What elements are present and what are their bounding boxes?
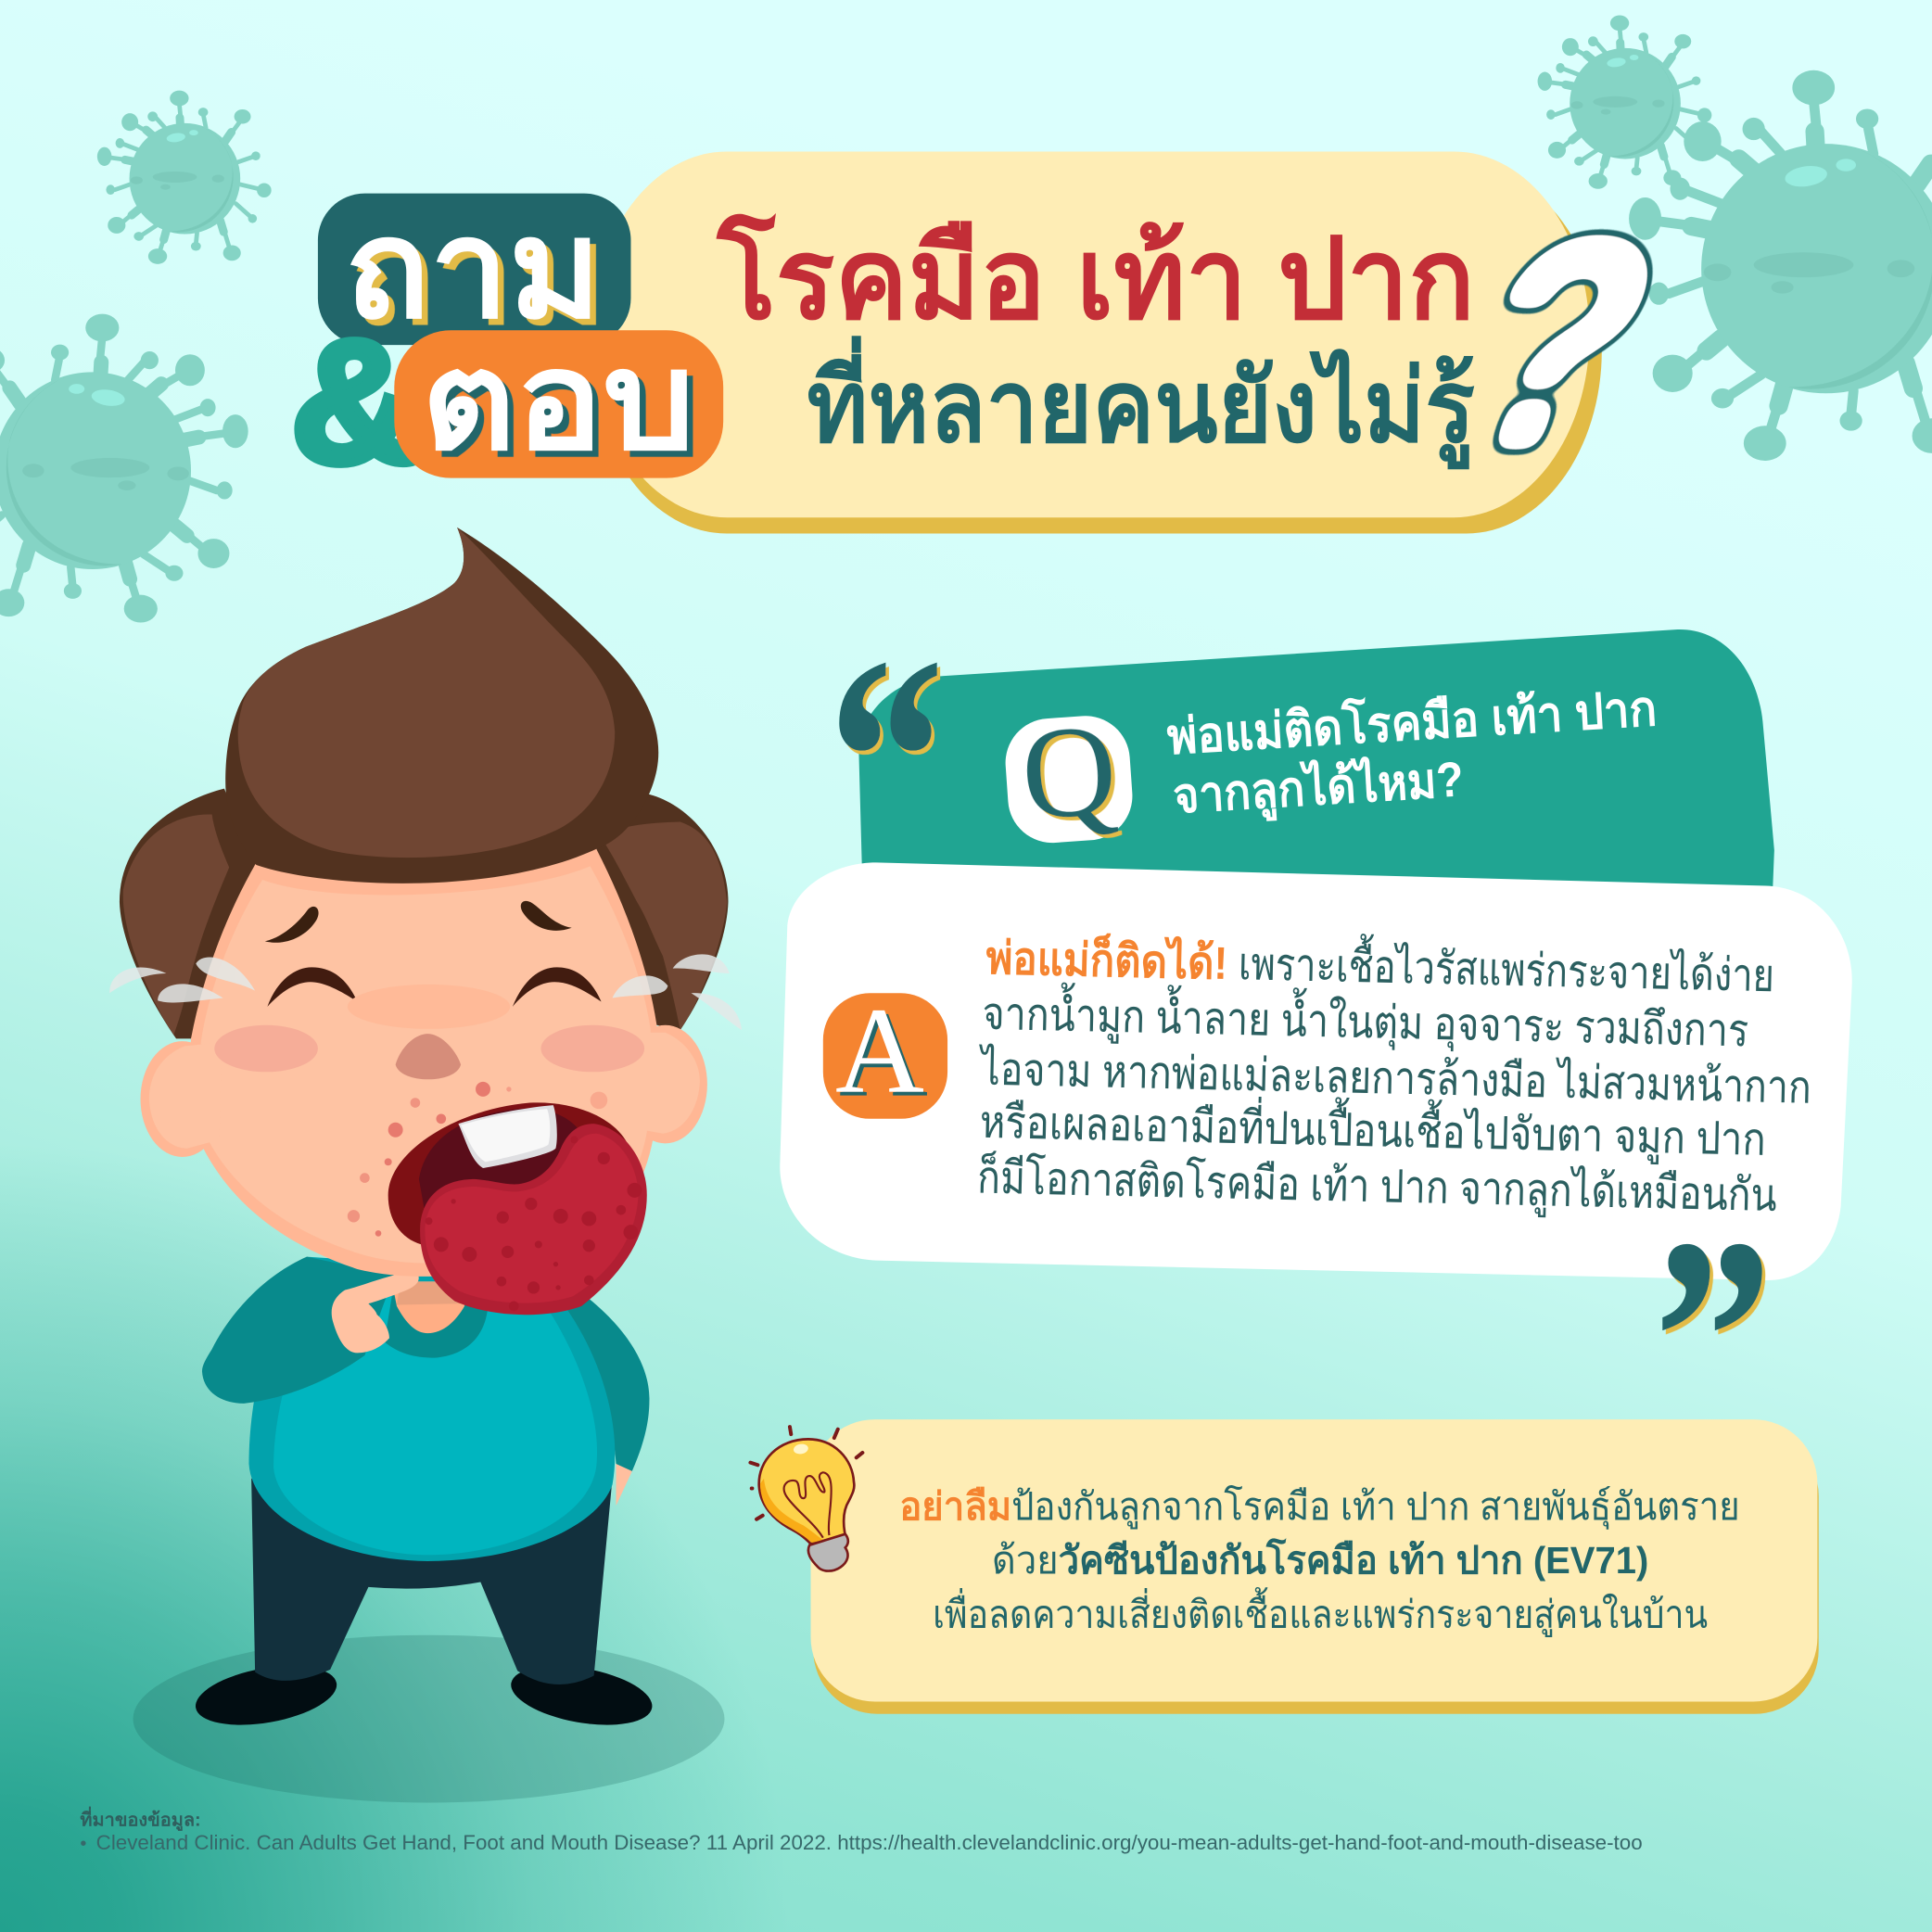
title pill — [591, 151, 1602, 533]
answer text — [975, 925, 1814, 1224]
icon: light bulb — [750, 1427, 862, 1571]
left ear — [141, 1041, 224, 1157]
left shoe — [191, 1657, 341, 1735]
badge: ตอบ: ตอบ — [422, 324, 695, 478]
reminder text: ด้วย — [992, 1539, 1059, 1582]
left hair — [120, 789, 256, 1038]
opening quote: “ — [828, 596, 945, 920]
reminder box — [811, 1419, 1819, 1714]
answer bubble — [780, 862, 1852, 1280]
eyebrows — [265, 901, 572, 943]
panel: reminder — [750, 1419, 1819, 1714]
source note: ที่มาของข้อมูล: — [80, 1806, 201, 1833]
source note: • — [80, 1834, 86, 1854]
answer text: หรือเผลอเอามือที่ปนเปื้อนเชื้อไปจับตา จมูก ปาก — [979, 1089, 1767, 1167]
hair top shadow — [225, 527, 658, 883]
face — [197, 866, 651, 1264]
panel: question — [828, 596, 1774, 920]
left arm sleeve — [202, 1257, 394, 1404]
question text: จากลูกได้ไหม? — [1172, 750, 1465, 827]
answer text: พ่อแม่ก็ติดได้! — [985, 930, 1228, 989]
tongue spots — [426, 1136, 642, 1311]
panel: answer — [780, 862, 1852, 1496]
A icon: A — [835, 983, 924, 1119]
right ear — [624, 1025, 707, 1143]
tears — [109, 954, 742, 1030]
ampersand: & — [291, 303, 420, 499]
question text: พ่อแม่ติดโรคมือ เท้า ปาก — [1165, 679, 1659, 765]
closing quote: ” — [1654, 1180, 1773, 1496]
ground shadow — [133, 1635, 724, 1802]
skin spots — [348, 1082, 607, 1237]
mouth — [388, 1102, 630, 1244]
right shoe — [506, 1657, 656, 1735]
answer text: ก็มีโอกาสติดโรคมือ เท้า ปาก จากลูกได้เหมือนกัน — [977, 1150, 1777, 1223]
hair top — [238, 527, 615, 858]
reminder text: เพื่อลดความเสี่ยงติดเชื้อและแพร่กระจายสู่คนในบ้าน — [933, 1587, 1708, 1638]
icon: virus left — [0, 314, 248, 622]
hand — [332, 1273, 419, 1353]
icon: virus top right small — [1538, 16, 1711, 189]
source note: Cleveland Clinic. Can Adults Get Hand, Foot and Mouth Disease? 11 April 2022. https://health.clevelandclinic.org/you-mean-adults-get-hand-foot-and-mouth-disease-too — [96, 1831, 1643, 1854]
icon: virus top left — [97, 91, 272, 264]
shirt — [248, 1257, 615, 1561]
question mark: ? — [1424, 181, 1695, 506]
question bubble — [858, 629, 1774, 912]
answer text: เพราะเชื้อไวรัสแพร่กระจายได้ง่าย — [1238, 931, 1775, 1001]
face outer — [187, 849, 656, 1277]
heading line 1: โรคมือ เท้า ปาก — [717, 213, 1475, 342]
reminder text — [899, 1485, 1740, 1638]
Q icon: Q — [1017, 697, 1121, 847]
mouth inner — [419, 1109, 589, 1220]
inner ear left — [149, 1042, 222, 1149]
nose bridge — [348, 985, 510, 1029]
reminder text: วัคซีนป้องกันโรคมือ เท้า ปาก (EV71) — [1059, 1538, 1648, 1582]
legs — [251, 1479, 613, 1684]
shirt front — [273, 1281, 597, 1555]
source note — [80, 1806, 1643, 1854]
neck — [394, 1281, 465, 1333]
nose — [396, 1034, 461, 1079]
icon: virus top right large — [1629, 70, 1932, 461]
right hand — [616, 1461, 632, 1506]
cheeks — [214, 1025, 644, 1072]
eyes — [267, 967, 602, 1007]
tooth — [458, 1105, 557, 1168]
question text — [1165, 679, 1662, 827]
title banner — [291, 151, 1695, 533]
right sleeve — [555, 1299, 649, 1471]
character: sick boy — [109, 527, 742, 1802]
inner ear right — [629, 1033, 700, 1134]
answer text: จากน้ำมูก น้ำลาย น้ำในตุ่ม อุจจาระ รวมถึงการ — [982, 981, 1749, 1059]
right hair — [596, 794, 728, 1030]
reminder text: อย่าลืม — [899, 1485, 1011, 1528]
reminder text: ป้องกันลูกจากโรคมือ เท้า ปาก สายพันธุ์อันตราย — [1011, 1485, 1740, 1530]
badge: ถาม: ถาม — [345, 192, 602, 347]
heading line 2: ที่หลายคนยังไม่รู้ — [807, 336, 1475, 469]
tongue — [420, 1124, 647, 1315]
collar — [385, 1281, 488, 1358]
